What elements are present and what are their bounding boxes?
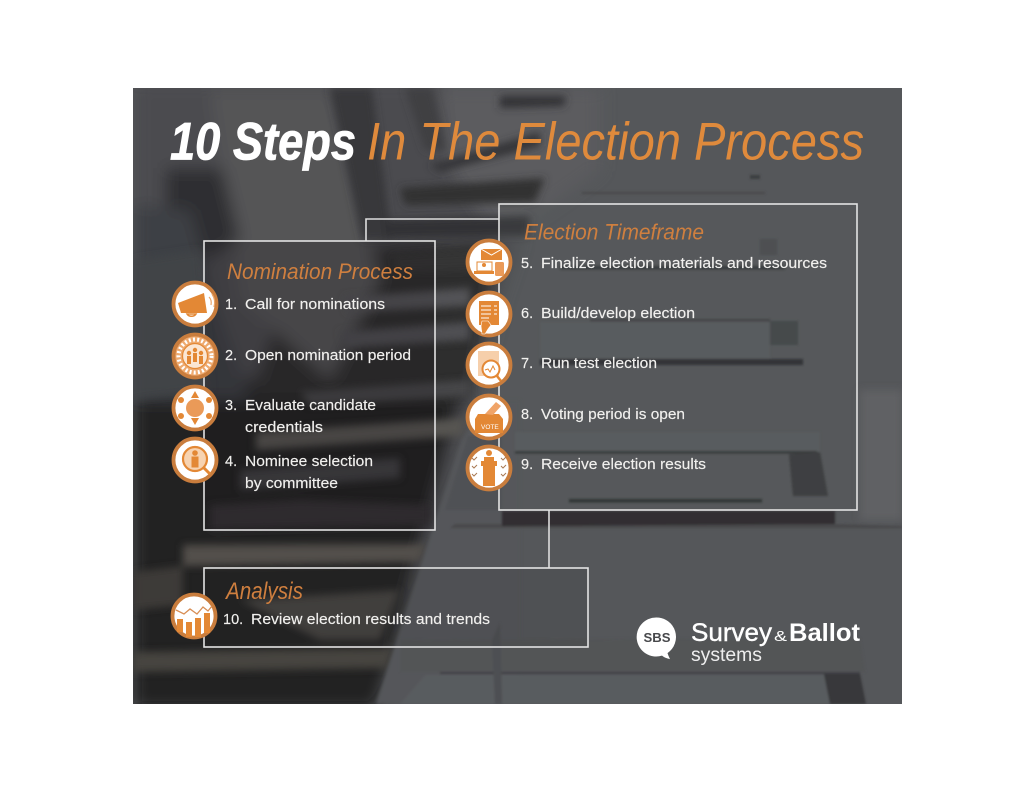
step 2: 2. [225, 348, 237, 364]
heading: nomination process: Nomination Process [227, 259, 413, 284]
background photo: boardroom table and chairs [133, 80, 902, 710]
icon: nominee magnifier [174, 438, 216, 482]
connector: election to analysis [548, 510, 550, 568]
step 5: 5. [521, 256, 533, 272]
logo mark: speech bubble [637, 617, 676, 659]
panel: election timeframe [499, 204, 857, 510]
icon: evaluate candidates around table [174, 386, 216, 430]
icon: election form with hand [468, 292, 510, 336]
logo subline: systems [691, 645, 762, 666]
logo mark: speech bubble: SBS [644, 630, 671, 645]
step 7: Run test election [541, 356, 657, 372]
step 3: 3. [225, 398, 237, 414]
step 4 [225, 454, 373, 492]
icon: podium with checklists [468, 446, 510, 490]
step 2: Open nomination period [245, 348, 411, 364]
icon: ballot box [468, 396, 510, 438]
logo wordmark: Survey [691, 619, 773, 647]
step 7: 7. [521, 356, 533, 372]
step 3 [225, 398, 376, 436]
panel: nomination process [204, 241, 435, 530]
step 1: 1. [225, 297, 237, 313]
icon: envelope and devices [468, 240, 510, 284]
title: 10 Steps [170, 112, 356, 172]
panel: analysis [204, 568, 588, 647]
connector: nomination to election [366, 219, 499, 241]
table edge over chairs [376, 514, 440, 704]
step 4: by committee [245, 476, 338, 492]
icon: test form under magnifier [468, 344, 510, 386]
step 9: 9. [521, 457, 533, 473]
step 1: Call for nominations [245, 297, 385, 313]
logo wordmark: Ballot [789, 619, 861, 647]
heading: analysis: Analysis [224, 578, 303, 605]
icon: open nomination people [174, 334, 216, 378]
step 3: Evaluate candidate [245, 398, 376, 414]
logo wordmark: & [774, 628, 787, 645]
step 6: Build/develop election [541, 306, 695, 322]
heading: election timeframe: Election Timeframe [524, 220, 704, 244]
step 6: 6. [521, 306, 533, 322]
step 5: Finalize election materials and resources [541, 256, 827, 272]
logo: Survey & Ballot systems [637, 617, 861, 666]
step 8: 8. [521, 407, 533, 423]
icon: ballot box: VOTE [481, 424, 499, 431]
step 8: Voting period is open [541, 407, 685, 423]
step 10: 10. [223, 612, 243, 628]
icon: megaphone [174, 282, 216, 326]
step 4: 4. [225, 454, 237, 470]
step 3: credentials [245, 420, 323, 436]
title: In The Election Process [367, 112, 864, 172]
title [170, 112, 864, 172]
step 4: Nominee selection [245, 454, 373, 470]
icon: bar chart with trend [172, 594, 216, 638]
step 9: Receive election results [541, 457, 706, 473]
step 10: Review election results and trends [251, 612, 490, 628]
logo wordmark [691, 619, 861, 647]
